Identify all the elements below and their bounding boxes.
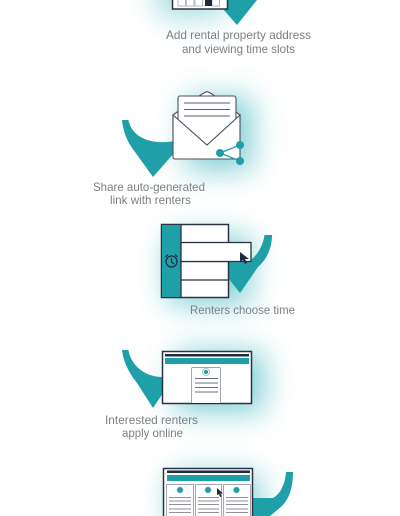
caption: step 4: apply online <box>122 426 183 440</box>
step 5: compare applications <box>164 468 293 516</box>
check mark: step 5 <box>250 472 293 516</box>
glow: step 3 <box>168 236 250 304</box>
caption: step 2: Share auto-generated <box>93 180 205 194</box>
envelope icon <box>173 92 244 165</box>
icon: cursor <box>217 488 223 497</box>
avatars <box>177 487 240 493</box>
check mark: step 3 <box>225 235 272 293</box>
step 4: apply online <box>105 350 264 440</box>
selected row <box>181 242 251 262</box>
icon: cursor <box>240 252 249 264</box>
calendar icon <box>172 0 228 9</box>
step 2: share link <box>93 92 252 207</box>
glow: step 2 <box>186 98 252 170</box>
caption: step 2 <box>93 180 205 207</box>
icon: avatar <box>202 368 210 376</box>
glow: step 5 <box>170 474 260 516</box>
caption: step 1 <box>166 28 311 56</box>
step 1: add property <box>158 0 311 56</box>
schedule panel icon <box>162 224 251 298</box>
caption: step 3: Renters choose time <box>190 303 295 317</box>
step 3: renters choose time <box>162 224 295 317</box>
caption: step 4 <box>105 413 198 440</box>
caption: step 1: and viewing time slots <box>182 42 295 56</box>
check mark: step 2 <box>122 120 175 177</box>
glow: step 4 <box>176 352 264 412</box>
application cards <box>166 484 250 516</box>
icon: alarm clock <box>166 254 178 267</box>
applications window icon <box>164 468 252 516</box>
icon: share <box>216 141 244 165</box>
glow: step 1 <box>158 0 224 16</box>
check mark: step 4 <box>122 350 165 408</box>
check mark: step 1 <box>218 0 257 25</box>
application window icon <box>162 352 252 404</box>
caption: step 2: link with renters <box>110 193 191 207</box>
caption: step 4: Interested renters <box>105 413 198 427</box>
caption: step 1: Add rental property address <box>166 28 311 42</box>
